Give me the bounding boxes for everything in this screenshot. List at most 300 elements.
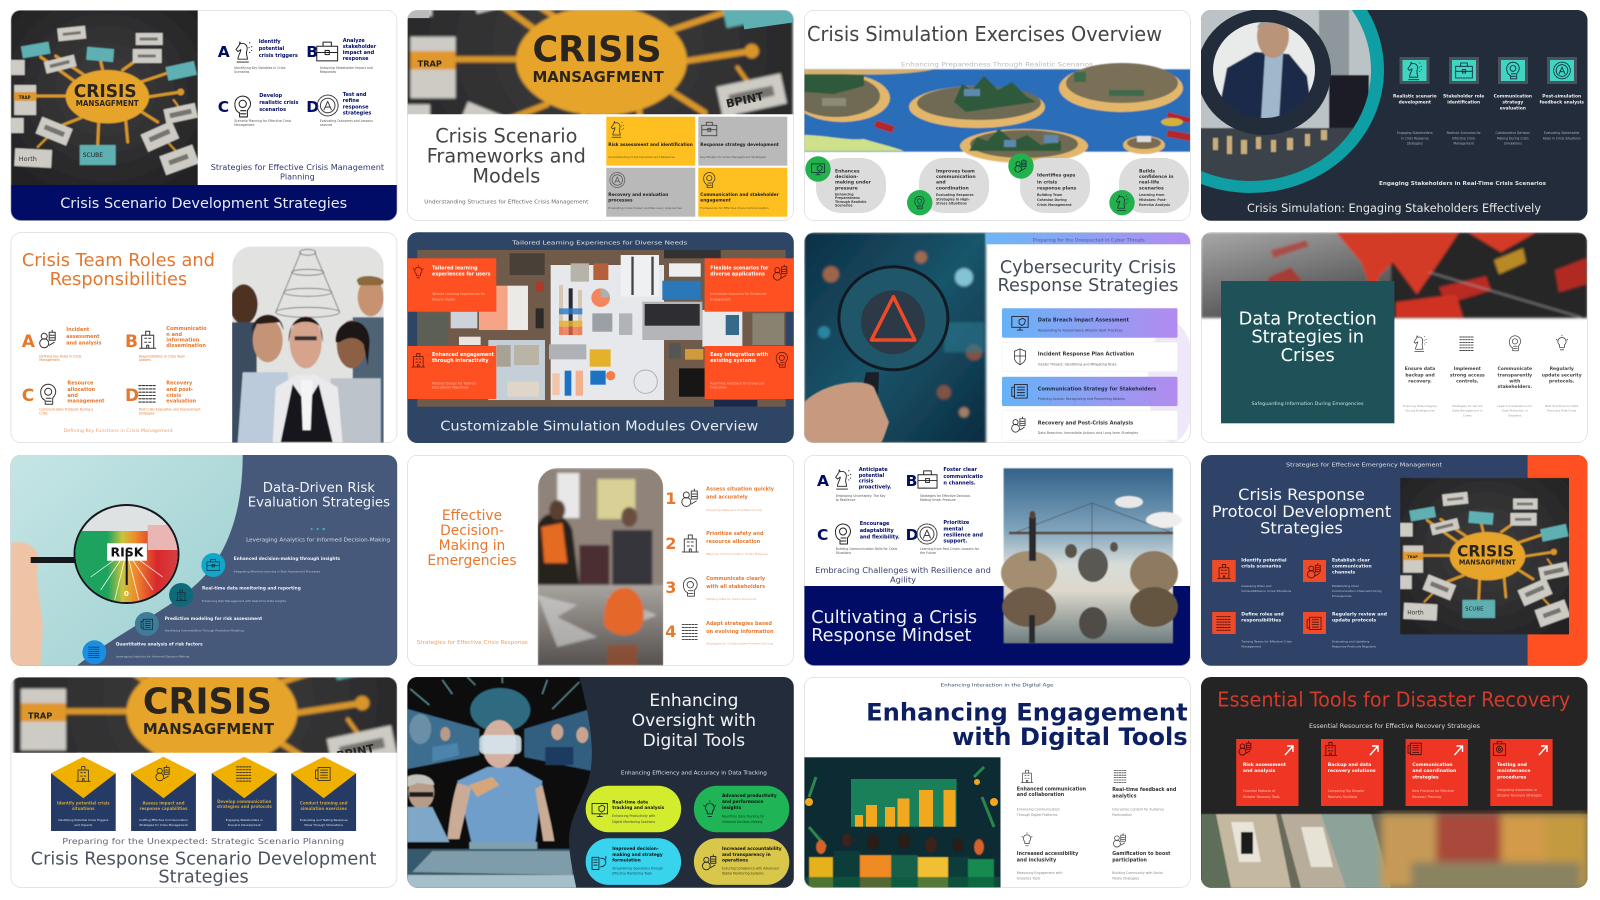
step labels: Post-simulation — [1542, 94, 1581, 100]
step labels: Realistic scenario — [1393, 94, 1437, 100]
panel: Enhancing Engagement with Digital Tools — [804, 677, 1190, 888]
item B: Responsibilities of Crisis Team — [139, 354, 185, 358]
item D: test strategies: Evaluating Outcomes and Lessons — [320, 119, 373, 123]
step labels: identification — [1447, 100, 1480, 106]
step descriptions: Simulations — [1504, 142, 1522, 146]
column 2: Strategies for Secure — [1452, 404, 1483, 408]
panel: Crisis Simulation Exercises Overview — [792, 10, 1191, 221]
item C: develop scenarios: scenarios — [259, 107, 286, 113]
step labels: Stakeholder role — [1443, 94, 1484, 100]
tile: recovery and evaluation — [606, 168, 695, 217]
item D: Learning from Past Crises: Lessons for — [920, 547, 980, 551]
step 2 — [665, 531, 768, 556]
item A: Incident — [66, 327, 90, 333]
item A: identify triggers: crisis triggers — [259, 53, 298, 59]
icon tile 4 — [1547, 57, 1577, 84]
step card 3 — [212, 757, 277, 831]
module box: easy integration: existing systems — [710, 358, 756, 364]
step 4: Strategies for Collaborative Problem Solving — [706, 642, 773, 646]
tile: risk assessment: Risk assessment and identification — [608, 142, 693, 148]
panel: Crisis Scenario Frameworks and Models — [407, 10, 794, 221]
item 4: Quantitative analysis of risk factors — [116, 641, 203, 647]
item B: Making Under Pressure — [920, 498, 956, 502]
title: Emergencies — [427, 553, 517, 569]
step card 1: and Impacts — [74, 823, 93, 827]
tool card 3: strategies — [1412, 774, 1439, 780]
module box: flexible scenarios: Engagement — [710, 297, 731, 301]
panel: Essential Tools for Disaster Recovery — [1201, 677, 1588, 892]
column 1: Ensuring Data Integrity — [1403, 404, 1437, 408]
column 4: Regularly — [1550, 366, 1574, 372]
item 4 — [82, 640, 203, 664]
tile: risk assessment: Understanding Crisis Dynamics and Response — [608, 155, 675, 159]
pill 4: Increased accountability — [722, 846, 782, 852]
photo: falling red arrows — [1201, 232, 1588, 318]
item B: analyze stakeholder impact: Analyzing Stakeholder Impact and — [320, 66, 373, 70]
photo: crisis management board: SCUBE — [1465, 607, 1484, 613]
item 4: Evaluating and Updating — [1332, 640, 1369, 644]
tile: communication: engagement — [700, 198, 731, 204]
step descriptions: Strategies — [1407, 142, 1423, 146]
column 3: Disasters — [1508, 413, 1522, 417]
item D: test strategies — [306, 92, 373, 127]
column 4: protocols. — [1549, 378, 1575, 384]
pill 3: Streamlining Operations through — [612, 867, 663, 871]
item B: analyze stakeholder impact: Analyze — [343, 38, 365, 44]
step labels: evaluation — [1500, 106, 1526, 112]
photo: crisis management close-up — [407, 10, 794, 114]
column 3 — [1497, 336, 1533, 417]
photo: crisis management close-up: CRISIS — [143, 681, 272, 722]
caption: Embracing Challenges with Resilience and — [815, 565, 991, 575]
item 1: Enhanced communication — [1017, 786, 1087, 792]
pill 1: Scenarios — [835, 204, 853, 208]
header strip — [986, 232, 1191, 244]
tool card 1: Essential Features of — [1243, 789, 1276, 793]
column 2 — [1450, 337, 1485, 417]
item B: Communicatio — [166, 326, 207, 332]
pill 1: Enhancing — [835, 192, 854, 196]
item C: Situations — [836, 551, 852, 555]
step labels: strategy — [1502, 100, 1523, 106]
tool card 2: recovery solutions — [1328, 768, 1376, 774]
item 4: Building Community with Social — [1112, 871, 1163, 875]
item D: resilience and — [943, 532, 983, 538]
item C: C — [22, 386, 34, 406]
item C: and flexibility. — [860, 534, 900, 540]
row 4: recovery: Data Breaches: Immediate Actions and Long-term Strategies — [1038, 431, 1138, 435]
pill 4: confidence in — [1139, 174, 1174, 180]
title: Effective — [442, 508, 502, 524]
item B: analyze stakeholder impact: Responses — [320, 70, 337, 74]
item 4: Gamification to boost — [1112, 851, 1171, 857]
step card 2 — [131, 757, 196, 831]
item 3: Increased accessibility — [1017, 851, 1079, 857]
pill 4 — [1109, 158, 1189, 215]
item 2 — [1112, 770, 1177, 817]
item D: D — [125, 386, 139, 406]
item 1 — [1016, 770, 1087, 817]
title: Strategies — [1260, 519, 1343, 538]
step descriptions: Evaluating Stakeholder — [1544, 131, 1580, 135]
item D: test strategies: D — [306, 98, 319, 116]
photo: damaged buildings — [1201, 814, 1588, 892]
pill 3: Building Team — [1037, 193, 1063, 197]
step card 3: Scenario Development — [228, 823, 262, 827]
photo: crisis management board: Horth — [1407, 610, 1424, 616]
item A: A — [817, 472, 829, 490]
pill 2: Improves team — [936, 168, 975, 174]
column 4: Best Practices for Data — [1545, 404, 1578, 408]
item A — [817, 467, 892, 502]
item A: identify triggers: Identifying Key Variables in Crisis — [234, 66, 286, 70]
item C: C — [817, 526, 828, 544]
item 2: Enhancing Risk Management with Real-Time Data Insights — [202, 599, 287, 603]
item 1: Identify potential — [1241, 557, 1287, 563]
item 3 — [135, 612, 262, 636]
item 2: channels — [1332, 570, 1355, 576]
item 4: Media Strategies — [1112, 877, 1139, 881]
module box: enhanced engagement: through interactivity — [432, 358, 489, 364]
tool card 3: Communication — [1412, 762, 1453, 768]
step 4: Adapt strategies based — [706, 621, 772, 627]
item 2: analytics — [1112, 794, 1137, 800]
tile: response strategy: Response strategy development — [700, 142, 779, 148]
tool card 1: Disaster Recovery Tools — [1243, 795, 1280, 799]
item A: to Resilience — [836, 498, 855, 502]
item B: analyze stakeholder impact: B — [306, 43, 318, 61]
tool card 1: and analysis — [1243, 768, 1276, 774]
pill 1: tracking and analysis — [612, 805, 665, 811]
step labels: feedback analysis — [1540, 100, 1584, 106]
step 2: resource allocation — [706, 539, 761, 545]
step labels: development — [1399, 100, 1431, 106]
item 2: Real-time feedback and — [1112, 787, 1177, 793]
pill 2: Real-Time Data Tracking for — [722, 815, 765, 819]
step descriptions — [1397, 131, 1581, 146]
pill 3: in crisis — [1037, 179, 1057, 185]
item D: Strategies — [139, 411, 155, 415]
item C: Resource — [67, 380, 94, 386]
photo: crisis management board: MANSAGFMENT — [1459, 559, 1516, 567]
title block: Crises — [1281, 345, 1335, 366]
tool card 3: Recovery Planning — [1412, 795, 1441, 799]
panel: Data Protection Strategies in Crises — [1201, 232, 1588, 443]
subtitle: Leveraging Analytics for Informed Decision-Making — [246, 537, 390, 543]
item C: Communication Protocols During a — [39, 407, 93, 411]
item 2: Participation — [1112, 813, 1132, 817]
pill 2: Advanced productivity — [722, 793, 777, 799]
item C: allocation — [67, 387, 96, 393]
tool card 2 — [1321, 739, 1383, 806]
module box: enhanced engagement — [408, 346, 496, 399]
item B: B — [125, 332, 138, 352]
title: Enhancing — [649, 691, 738, 711]
item A: and analysis — [66, 340, 102, 346]
item 3: Define roles and — [1241, 611, 1284, 617]
pill 2 — [694, 786, 789, 832]
step 3: Utilizing Data for Rapid Decisions — [706, 597, 757, 601]
step card 4: Plans Through Simulations — [305, 823, 343, 827]
item D: mental — [943, 526, 963, 532]
item B: B — [906, 472, 917, 490]
item 1: Enhancing Communication — [1017, 808, 1060, 812]
tile: communication: Communication and stakeholder — [700, 192, 780, 198]
module box: tailored learning: Tailored Learning Experiences for — [431, 292, 486, 296]
item A: proactively. — [859, 484, 892, 490]
item A: identify triggers: Scenarios — [234, 70, 250, 74]
illustration: audience and bar chart — [804, 757, 1000, 888]
item D: test strategies: Test and — [343, 92, 367, 98]
column 3: Legal Considerations for — [1497, 404, 1533, 408]
pill 3: Improved decision- — [612, 846, 659, 852]
photo: crisis management close-up: BPINT — [725, 90, 765, 111]
item 3: and inclusivity — [1017, 858, 1057, 864]
photo: crisis management board: SCUBE — [83, 152, 103, 159]
tool card 2: Recovery Solutions — [1328, 795, 1358, 799]
title: Oversight with — [632, 711, 756, 731]
pill 4: Mistakes: Post- — [1139, 198, 1167, 202]
step card 1: situations — [72, 806, 95, 811]
panel: Enhancing Oversight with Digital Tools — [407, 677, 794, 888]
title band — [11, 185, 397, 221]
item 2: communication — [1332, 563, 1372, 569]
item 3: Analytics Tools — [1017, 877, 1040, 881]
module box: enhanced engagement: Enhanced engagement — [432, 352, 495, 358]
item 3: Training Teams for Effective Crisis — [1240, 640, 1292, 644]
caption: Strategies for Effective Crisis Management — [211, 162, 384, 172]
item A: identify triggers: A — [218, 43, 230, 61]
step 1: Analyzing Risks and Priorities Quickly — [706, 508, 762, 512]
item 2: Establish clear — [1332, 557, 1371, 563]
item D: Recovery — [166, 380, 193, 386]
title: Making in — [439, 538, 505, 554]
item D: evaluation — [166, 398, 197, 404]
caption: Strategies for Effective Crisis Response — [417, 640, 528, 646]
step 3 — [665, 576, 766, 601]
column 4: Recovery Post-Crisis — [1547, 408, 1577, 412]
step 1: and accurately — [706, 494, 749, 500]
panel: Crisis Scenario Development Strategies — [11, 10, 397, 221]
icon tile 1 — [1400, 57, 1430, 84]
item 3: Predictive modeling for risk assessment — [165, 616, 262, 622]
pill 1: pressure — [835, 185, 858, 191]
pill 1: Real-time data — [612, 800, 648, 806]
item D: test strategies: refine — [343, 98, 360, 104]
item A: Defining Key Roles in Crisis — [39, 354, 82, 358]
photo: executive inside teal ring — [1201, 10, 1384, 193]
item B — [125, 326, 207, 362]
row 4: recovery: Recovery and Post-Crisis Analysis — [1038, 420, 1133, 426]
step 4 — [665, 621, 774, 646]
step card 3: Develop communication — [217, 799, 271, 804]
column 3: with — [1509, 378, 1520, 384]
title: Crisis Scenario — [435, 124, 577, 148]
step labels: Communication — [1494, 94, 1532, 100]
pill 4: Ensuring Compliance with Advanced — [722, 867, 779, 871]
step 1: 1 — [665, 489, 676, 508]
step 3: 3 — [665, 578, 676, 597]
row 3: communication: Phishing Scams: Recognizing and Preventing Attacks — [1038, 397, 1125, 401]
step 3: Communicate clearly — [706, 576, 766, 582]
pill 1: decision- — [835, 174, 858, 180]
row 4: recovery — [1002, 411, 1178, 440]
title band: Crisis Scenario Development Strategies — [60, 196, 347, 212]
pill 2: Informed Decision-Making — [722, 820, 762, 824]
column 1: During Emergencies — [1405, 408, 1435, 412]
item B: information — [166, 338, 200, 344]
caption: Planning — [280, 172, 315, 182]
step descriptions: Effective Crisis — [1452, 136, 1476, 140]
pill 3: Effective Monitoring Tools — [612, 871, 652, 875]
column 2: controls. — [1456, 378, 1479, 384]
tile: recovery and evaluation: Recovery and evaluation — [608, 192, 668, 198]
carousel dots — [311, 528, 325, 530]
module box: flexible scenarios — [705, 258, 794, 312]
tool card 1 — [1236, 739, 1298, 806]
tool card 3 — [1406, 739, 1468, 806]
item D: Prioritize — [943, 520, 970, 526]
item 4: Response Protocols Regularly — [1332, 645, 1376, 649]
item B: analyze stakeholder impact: stakeholder — [343, 44, 377, 50]
pill 1: Enhances — [835, 168, 860, 174]
photo: crisis management close-up: CRISIS — [532, 29, 662, 70]
item D — [906, 520, 983, 555]
tile: risk assessment — [606, 117, 695, 166]
title band — [804, 586, 1190, 666]
item C: develop scenarios: Develop — [259, 93, 283, 99]
item A: A — [22, 332, 36, 352]
item 1: and collaboration — [1017, 792, 1065, 798]
title: Customizable Simulation Modules Overview — [440, 419, 759, 434]
photo: crisis management board: Horth — [19, 155, 37, 163]
title block: Safeguarding Information During Emergencies — [1252, 401, 1364, 407]
title: Response Strategies — [998, 276, 1178, 296]
pill 3: Cohesion During — [1037, 198, 1067, 202]
module box: tailored learning: experiences for users — [432, 271, 491, 277]
photo: crisis management board: TRAP — [1407, 555, 1418, 559]
step card 1: Identifying Potential Crisis Triggers — [58, 818, 109, 822]
title: Crisis Simulation: Engaging Stakeholders Effectively — [1247, 201, 1541, 215]
module box: easy integration: Easy integration with — [710, 352, 769, 358]
subtitle: Essential Resources for Effective Recovery Strategies — [1309, 724, 1480, 730]
item B: n channels. — [943, 480, 976, 486]
pill 1 — [805, 156, 886, 213]
column 3: transparently — [1497, 372, 1532, 378]
item A: crisis — [859, 478, 874, 484]
pill 3 — [1008, 153, 1090, 213]
subtitle: Strategies for Effective Emergency Management — [1286, 463, 1442, 469]
item D: test strategies: Learned — [320, 123, 332, 127]
item D — [125, 380, 201, 415]
tool card 2: Backup and data — [1328, 762, 1371, 768]
pill 2: Evaluating Response — [936, 193, 974, 197]
item B: analyze stakeholder impact — [306, 38, 377, 74]
row 3: communication — [1002, 377, 1178, 406]
item 3 — [1017, 833, 1079, 881]
photo: crisis management board: CRISIS — [1457, 541, 1514, 560]
pill 4: Builds — [1139, 168, 1155, 174]
step card 1 — [51, 757, 116, 831]
column 1: recovery. — [1408, 378, 1432, 384]
pill 2: Strategies in High- — [936, 197, 971, 201]
tool card 4: procedures — [1497, 774, 1526, 780]
item 4: participation — [1112, 858, 1148, 864]
illustration: risk magnifier: RISK — [111, 545, 145, 560]
illustration: risk magnifier: 0 — [124, 590, 129, 598]
tile: recovery and evaluation: Evaluating Crisis Impact and Recovery Approaches — [608, 206, 682, 210]
tile: communication — [698, 168, 787, 217]
item C: develop scenarios: Management — [234, 123, 255, 127]
pill 3: Identifies gaps — [1037, 173, 1076, 179]
item C — [817, 521, 900, 555]
step card 2: response capabilities — [140, 806, 188, 811]
item C: Crisis — [39, 411, 48, 415]
item 2: Emergencies — [1332, 594, 1352, 598]
pill 4: Learning from — [1139, 193, 1165, 197]
item 1: Enhanced decision-making through insights — [234, 556, 341, 562]
item C: management — [67, 398, 105, 404]
title: Evaluation Strategies — [248, 496, 390, 510]
item A: Embracing Uncertainty: The Key — [836, 494, 886, 498]
step descriptions: Making During Crisis — [1497, 136, 1529, 140]
photo: crisis management close-up: MANSAGFMENT — [143, 720, 275, 738]
step card 3: Engaging Stakeholders in — [226, 818, 263, 822]
item A: Anticipate — [859, 467, 888, 473]
title: Strategies — [158, 868, 249, 888]
title: Protocol Development — [1212, 502, 1391, 521]
module box: tailored learning — [408, 258, 496, 312]
pill 2 — [907, 158, 989, 215]
module box: easy integration: Real-Time Feedback for Enhanced — [710, 381, 764, 385]
title band: Cultivating a Crisis — [811, 608, 977, 628]
pill 1 — [586, 786, 681, 832]
subtitle: Enhancing Interaction in the Digital Age — [940, 683, 1054, 689]
column 2: strong access — [1450, 372, 1485, 378]
panel: Customizable Simulation Modules Overview — [407, 232, 794, 443]
row 1: data breach — [1002, 308, 1178, 338]
item A — [22, 327, 102, 362]
illustration: risk magnifier — [11, 500, 186, 666]
photo: crisis management close-up — [14, 535, 403, 896]
row 3: communication: Communication Strategy for Stakeholders — [1038, 386, 1156, 392]
tool card 3: Best Practices for Effective — [1412, 789, 1454, 793]
panel: Crisis Simulation Engaging Stakeholders — [1201, 10, 1588, 221]
caption: Engaging Stakeholders in Real-Time Crisis Scenarios — [1379, 181, 1546, 187]
pill 1: making under — [835, 180, 872, 186]
item A: identify triggers: Identify — [259, 39, 281, 45]
column 1: backup and — [1405, 372, 1435, 378]
step 2: Effective Communication Under Pressure — [706, 552, 768, 556]
item 4 — [1112, 834, 1171, 881]
step descriptions: Roles in Crisis Situations — [1543, 136, 1581, 140]
pill 2: and performance — [722, 799, 764, 805]
photo: crisis management board — [1400, 478, 1572, 637]
module box: flexible scenarios: Interactive Scenarios for Enhanced — [710, 292, 766, 296]
photo: emergency training room — [537, 468, 664, 666]
title: Frameworks and — [427, 144, 586, 168]
photo: magnifier over alert triangle — [804, 232, 986, 443]
title block: Data Protection — [1239, 308, 1377, 329]
icon tile 3 — [1498, 57, 1528, 84]
pill 2: and — [936, 180, 946, 186]
photo: crisis management board: MANSAGFMENT — [76, 99, 140, 108]
pill 1: Digital Monitoring Solutions — [612, 820, 655, 824]
item D: Post-Crisis Evaluation and Improvement — [139, 407, 201, 411]
title block: Strategies in — [1251, 327, 1364, 348]
caption: Preparing for the Unexpected: Strategic Scenario Planning — [62, 837, 344, 846]
item B: communicatio — [943, 474, 983, 480]
